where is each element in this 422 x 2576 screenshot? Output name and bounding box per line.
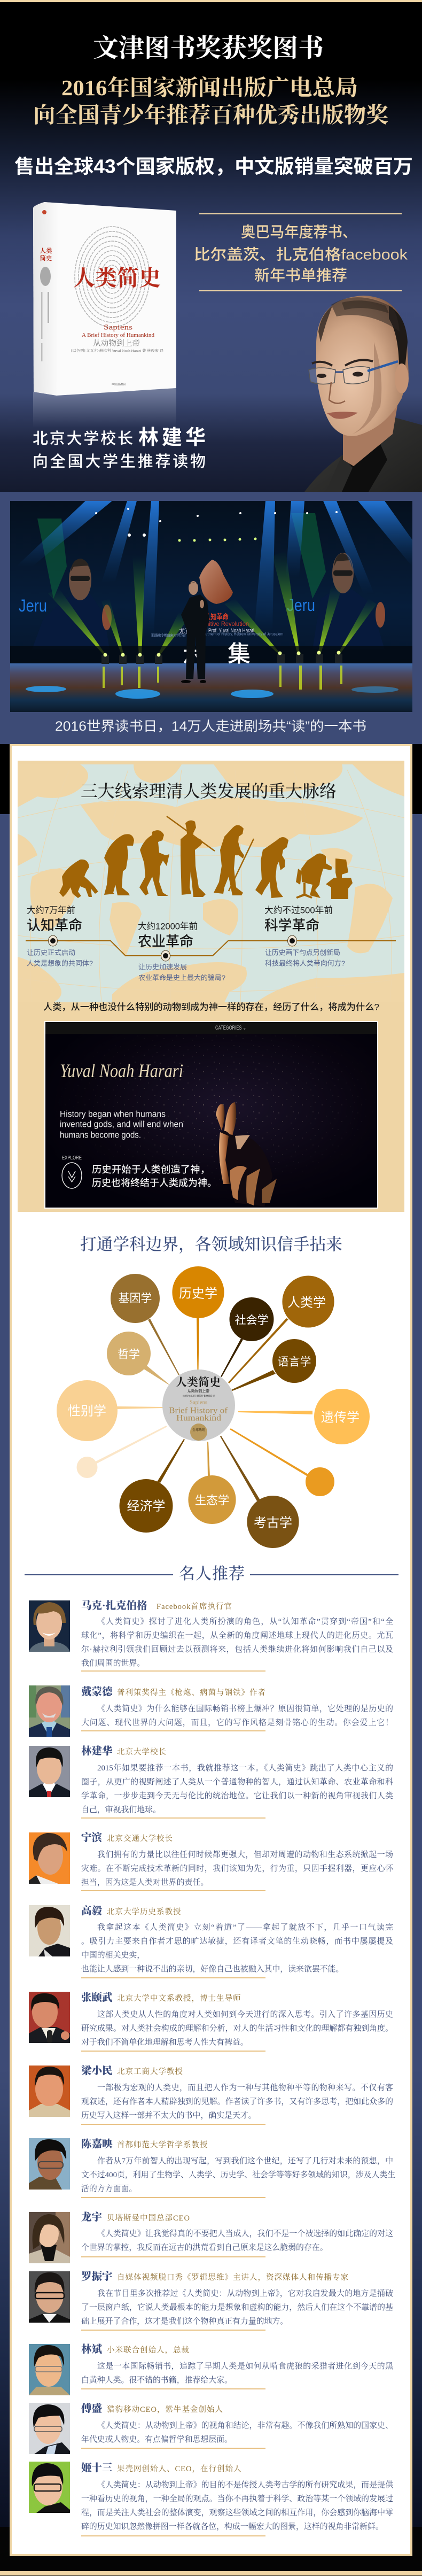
photo: theatre stage with speaker xyxy=(10,501,412,712)
heading: three threads: 三大线索理清人类发展的重大脉络 xyxy=(81,782,337,801)
center book: Sapiens: Brief History of xyxy=(169,1406,228,1415)
quote: 我们拥有的力量比以往任何时候都更强大，但却对周遭的动物和生态系统掀起一场 xyxy=(97,1851,393,1859)
quote: 年代史或人物史。有点偏哲学和思想层面。 xyxy=(81,2435,232,2444)
image: author web page screenshot: humans become gods. xyxy=(60,1130,141,1140)
portrait xyxy=(29,1600,70,1652)
quote: 也能让人感到一种说不出的亲切，好像自己也被融入其中，读来欲罢不能。 xyxy=(81,1965,343,1974)
name: 姬十三 xyxy=(81,2463,113,2474)
panel: three revolutions on map background xyxy=(18,761,404,1212)
quote xyxy=(81,1850,393,1887)
callout: book lists: 比尔盖茨、扎克伯格facebook xyxy=(194,246,408,263)
spine details xyxy=(42,210,46,214)
bubble: sociology (社会学): 社会学 xyxy=(235,1314,268,1327)
quote: 础上展开了合作，这才是我们这个物种真正有力量的地方。 xyxy=(81,2317,288,2326)
quote: 白黄种人类。很不错的书籍，推荐给大家。 xyxy=(81,2376,232,2385)
role: Facebook首席执行官 xyxy=(157,1603,232,1611)
recommendation: 戴蒙德 xyxy=(29,1685,393,1737)
center book: Sapiens: 从动物到上帝 xyxy=(187,1389,209,1393)
text: scientific revolution: 让历史画下句点另创新局 xyxy=(265,948,340,957)
name: 马克·扎克伯格 xyxy=(81,1600,147,1612)
book cover: A Brief History of Humankind xyxy=(82,332,154,338)
quote xyxy=(81,2156,395,2193)
name: 高毅 xyxy=(81,1906,102,1917)
quote xyxy=(81,2083,393,2120)
bubble: ecology (生态学): 生态学 xyxy=(195,1494,229,1507)
center book: Sapiens: 全球热销 xyxy=(192,1428,205,1432)
blue beams xyxy=(16,501,412,636)
portrait xyxy=(29,1905,70,1956)
center book: Sapiens xyxy=(162,1370,235,1441)
text: agricultural revolution: 大约12000年前 xyxy=(138,922,198,931)
screen captions: 尤瓦 xyxy=(179,628,191,635)
text: Peking University recommendation: 林建华 xyxy=(138,427,206,449)
portrait xyxy=(29,1992,70,2043)
recommendation: 林建华 xyxy=(29,1745,393,1819)
bubble: archaeology (考古学) xyxy=(247,1496,299,1548)
bubble: anthropology (人类学) xyxy=(282,1275,334,1328)
quote: 我在节目里多次推荐过《人类简史：从动物到上帝》，它对我启发最大的地方是捅破 xyxy=(97,2289,393,2298)
role: 北京大学校长 xyxy=(117,1748,167,1757)
screen captions: Prof. Yuval Noah Harari xyxy=(208,628,254,634)
heading: crossing disciplines: 打通学科边界，各领域知识信手拈来 xyxy=(80,1235,342,1254)
book cover: Sapiens xyxy=(104,324,132,331)
quote xyxy=(81,1923,393,1974)
role: 贝塔斯曼中国总部CEO xyxy=(107,2214,190,2223)
recommendation: 林斌 xyxy=(29,2343,393,2395)
bubble: philosophy (哲学): 哲学 xyxy=(118,1348,140,1361)
bubble: heredity (遗传学) xyxy=(314,1389,370,1444)
image: author web page screenshot: 历史也将终结于人类成为神。 xyxy=(92,1178,217,1188)
callout: book lists: 新年书单推荐 xyxy=(254,267,347,283)
quote: 碎的历史知识忽然像拼图一样各就各位，构成一幅宏大的图景，这样的视角非常新鲜。 xyxy=(81,2523,384,2531)
title: award: 文津图书奖获奖图书 xyxy=(93,35,324,63)
quote xyxy=(81,1617,393,1668)
text: scientific revolution: 科学革命 xyxy=(264,917,319,933)
timeline line with nodes xyxy=(26,935,396,961)
bubble: gender studies (性别学): 性别学 xyxy=(68,1404,106,1419)
icon: fingerprint on cover xyxy=(75,227,150,327)
heading: celebrity recommendations: 名人推荐 xyxy=(179,1565,245,1583)
text: central question: 人类，从一种也没什么特别的动物到成为神一样的存在，经历了什么，将成为什么? xyxy=(43,1002,379,1012)
role: 小米联合创始人，总裁 xyxy=(107,2346,190,2355)
text: sales claim: 售出全球43个国家版权，中文版销量突破百万 xyxy=(14,155,413,177)
quote: 这是一本国际畅销书，追踪了早期人类是如何从啃食虎狼的采猎者进化到今天的黑 xyxy=(97,2362,393,2371)
text: cognitive revolution xyxy=(27,906,93,968)
image: author web page screenshot: Yuval Noah Harari xyxy=(60,1060,183,1081)
book cover xyxy=(33,202,176,396)
role: 猎豹移动CEO，紫牛基金创始人 xyxy=(107,2405,223,2414)
image: author web page screenshot: CATEGORIES ⌄ xyxy=(215,1025,246,1031)
quote: 尔·赫拉利引领我们回顾过去以预测将来，包括人类继续进化将如何影响我们自己以及 xyxy=(81,1645,393,1654)
bubble: heredity (遗传学): 遗传学 xyxy=(321,1410,360,1425)
portrait xyxy=(29,2066,70,2117)
quote: 研究成果。对人类社会构成的理解和分析，对人的生活习性和文化的理解都有独到角度。 xyxy=(81,2024,393,2033)
quote xyxy=(81,1704,393,1727)
quote: 历史写入这样一部并不太大的书中，确实是天才。 xyxy=(81,2111,256,2120)
bubble: archaeology (考古学): 考古学 xyxy=(254,1516,292,1530)
book cover: 简史 xyxy=(40,254,52,262)
text: Peking University recommendation: 向全国大学生推荐读物 xyxy=(33,453,206,470)
role: 首都师范大学哲学系教授 xyxy=(117,2141,208,2149)
rock on screen xyxy=(199,560,233,604)
world map background xyxy=(18,764,404,1002)
image: author web page screenshot: 历史开始于人类创造了神， xyxy=(92,1164,210,1175)
quote: 文不过400页，利用了生物学、人类学、历史学、社会学等等好多领域的知识，涉及人类生 xyxy=(81,2171,395,2179)
name: 罗振宇 xyxy=(81,2271,113,2283)
bubble: ecology (生态学) xyxy=(188,1475,236,1524)
quote: 观叙述，还有作者本人精辟独到的见解。作者读了许多书，又有许多思考，把如此众多的 xyxy=(81,2098,393,2106)
text: cognitive revolution: 人类是想象的共同体? xyxy=(27,959,93,968)
bubble: sociology (社会学) xyxy=(230,1297,273,1341)
author portrait xyxy=(304,296,422,492)
bubble: economics (经济学): 经济学 xyxy=(127,1499,166,1514)
image: author web page screenshot: History began when humans xyxy=(60,1109,166,1119)
bubble: genetics (基因学) xyxy=(111,1274,160,1323)
portrait xyxy=(29,2212,70,2263)
quote xyxy=(81,1763,393,1814)
icon: explore chevrons xyxy=(62,1163,82,1188)
book cover: [以色列] 尤瓦尔·赫拉利 Yuval Noah Harari 著 林俊宏 译 xyxy=(71,349,163,353)
quote xyxy=(81,2478,393,2534)
right screen xyxy=(287,513,385,649)
quote: 自己，审视我们地球。 xyxy=(81,1806,161,1814)
image: author web page screenshot: EXPLORE xyxy=(62,1155,82,1161)
recommendation: 高毅 xyxy=(29,1905,393,1978)
screen captions: artment of History, Hebrew University of Jerusalem xyxy=(205,633,283,636)
right screen: Jeru xyxy=(287,595,315,615)
portrait xyxy=(29,2138,70,2190)
name: 戴蒙德 xyxy=(81,1687,113,1698)
quote: 我拿起这本《人类简史》立刻“着道”了——拿起了就放不下，几乎一口气读完 xyxy=(97,1923,393,1932)
heading: recommendation award xyxy=(33,75,388,127)
quote xyxy=(81,2419,393,2447)
screen captions: 耶路撒冷希伯来大学历史 xyxy=(151,633,186,637)
text: cognitive revolution: 认知革命 xyxy=(27,917,82,933)
bubble: history (历史学) xyxy=(172,1266,224,1318)
bubble: economics (经济学) xyxy=(120,1479,173,1533)
divider lines xyxy=(199,213,402,214)
quote: 。吸引力主要来自作者才思的旷达敏捷，还有译者文笔的生动晓畅，而书中屡屡提及 xyxy=(81,1937,393,1946)
left screen: Jeru xyxy=(19,596,47,615)
recommendation: 龙宇 xyxy=(29,2211,393,2263)
image: author web page screenshot: invented gods, and will end when xyxy=(60,1119,183,1129)
quote: 我们周围的世界。 xyxy=(81,1659,145,1668)
recommendation: 宁滨 xyxy=(29,1832,393,1891)
text: agricultural revolution: 农业革命 xyxy=(138,933,193,949)
name: 梁小民 xyxy=(81,2066,113,2077)
quote: 圈子，从更广的视野阐述了人类从一个普通物种的智人，通过认知革命、农业革命和科 xyxy=(81,1778,393,1786)
center book: Sapiens: 人类简史 xyxy=(176,1376,221,1389)
text: scientific revolution xyxy=(264,906,345,968)
center book: Sapiens: [以色列] 尤瓦尔·赫拉利 著 林俊宏 译 xyxy=(183,1394,215,1397)
book cover: 人类 xyxy=(40,247,52,254)
stage lights xyxy=(101,654,342,664)
quote: 球化”，将科学和历史编织在一起，从全新的角度阐述地球上现代人的进化历史。尤瓦 xyxy=(81,1631,393,1640)
quote: 《人类简史：从动物到上帝》的视角和结论，非常有趣。不像我们所熟知的国家史、 xyxy=(97,2422,393,2430)
quote: 《人类简史》为什么能够在国际畅销书榜上爆冲？原因很简单，它处理的是历史的 xyxy=(97,1705,393,1713)
text: book title on cover: 人类简史 xyxy=(73,266,161,290)
quote: 大问题、现代世界的大问题，而且，它的写作风格是刻骨铭心的生动。你会爱上它！ xyxy=(81,1719,393,1727)
portrait xyxy=(29,1685,70,1737)
stage signage: 集 xyxy=(228,641,251,667)
name: 宁滨 xyxy=(81,1832,102,1844)
quote: 学革命，一步步走到今天无与伦比的统治地位。它让我们以一种新的视角审视我们人类 xyxy=(81,1792,393,1800)
quote xyxy=(81,2362,393,2385)
center book: Sapiens: Humankind xyxy=(176,1413,221,1423)
recommendation: 罗振宇 xyxy=(29,2271,393,2331)
role: 果壳网创始人、CEO，在行创始人 xyxy=(117,2465,241,2473)
quote: 2015年如果要推荐一本书，我就推荐这一本。《人类简史》跳出了人类中心主义的 xyxy=(97,1764,393,1773)
center book: Sapiens: Sapiens xyxy=(190,1399,207,1406)
hand with finger xyxy=(216,1102,277,1206)
heading: recommendation award: 向全国青少年推荐百种优秀出版物奖 xyxy=(33,103,388,127)
quote: 一种看历史的视角，一种全局的观点。当你不再执着于科学、政治等某一个领域的发展过 xyxy=(81,2495,393,2503)
text: agricultural revolution xyxy=(138,922,225,981)
screen captions: nitive Revolution xyxy=(206,620,249,628)
role: 北京大学中文系教授，博士生导师 xyxy=(117,1994,241,2003)
name: 陈嘉映 xyxy=(81,2139,113,2150)
portrait xyxy=(29,2403,70,2454)
bubble: small left xyxy=(77,1457,97,1478)
name: 龙宇 xyxy=(81,2212,102,2223)
portrait xyxy=(29,2271,70,2323)
ceiling lamps xyxy=(95,508,338,542)
text: agricultural revolution: 农业革命是史上最大的骗局? xyxy=(138,974,225,981)
name: 张颐武 xyxy=(81,1992,113,2003)
recommendation: 梁小民 xyxy=(29,2065,393,2125)
quote xyxy=(81,2229,393,2252)
quote: 担当，因为这是人类对世界的责任。 xyxy=(81,1878,208,1887)
left screen xyxy=(19,519,112,649)
portrait xyxy=(29,1832,70,1884)
quote: 《人类简史：从动物到上帝》的目的不是传授人类考古学的所有研究成果，而是提供 xyxy=(97,2481,393,2489)
bubble: small right xyxy=(306,1467,334,1496)
text: cognitive revolution: 大约7万年前 xyxy=(27,906,75,915)
callout: book lists: 奥巴马年度荐书、 xyxy=(241,223,357,241)
text: scientific revolution: 科技最终将人类带向何方? xyxy=(265,959,345,968)
screen captions xyxy=(151,613,283,637)
quote: 了一层窗户纸，它说人类最根本的能力是想象和虚构的能力，然后人们在这个不靠谱的基 xyxy=(81,2303,393,2312)
recommendation: 姬十三 xyxy=(29,2462,397,2537)
role: 北京大学历史系教授 xyxy=(107,1908,182,1916)
recommendation: 陈嘉映 xyxy=(29,2138,395,2198)
quote: 程，而是关注人类社会的整体演变，观察这些领域之间的相互作用，你会感到你脑海中零 xyxy=(81,2509,393,2517)
quote: 对于我们不简单化地理解和思考人性大有裨益。 xyxy=(81,2038,248,2047)
name: 林建华 xyxy=(81,1746,113,1757)
text: cognitive revolution: 让历史正式启动 xyxy=(27,948,75,957)
quote: 中国的相关史实， xyxy=(81,1951,145,1960)
quote: 活的方方面面。 xyxy=(81,2185,137,2193)
stage signage xyxy=(183,641,251,667)
portrait xyxy=(29,1746,70,1797)
quote: 一部极为宏观的人类史，而且把人作为一种与其他物种平等的物种来写。不仅有客 xyxy=(97,2084,393,2092)
role: 普利策奖得主《枪炮、病菌与钢铁》作者 xyxy=(117,1689,266,1697)
stage band and floor xyxy=(10,646,412,665)
quote: 《人类简史》探讨了进化人类所扮演的角色，从“认知革命”贯穿到“帝国”和“全 xyxy=(97,1618,393,1626)
role: 北京交通大学校长 xyxy=(107,1835,173,1843)
quote xyxy=(81,2289,393,2326)
panel: white content card xyxy=(10,744,412,2556)
name: 林斌 xyxy=(81,2344,102,2355)
speaker figure xyxy=(181,581,209,683)
book cover: 从动物到上帝 xyxy=(93,338,140,348)
text: Peking University recommendation xyxy=(33,427,206,470)
role: 北京工商大学教授 xyxy=(117,2068,183,2076)
recommendation: 傅盛 xyxy=(29,2403,393,2454)
chart: discipline mind map xyxy=(57,1266,370,1548)
quote: 灾难。在不断完成技术革新的同时，我们该知为先，行为重，只因手握利器，更应心怀 xyxy=(81,1865,393,1873)
recommendation: 马克·扎克伯格 xyxy=(29,1600,393,1672)
portrait xyxy=(29,2462,70,2513)
bubble: genetics (基因学): 基因学 xyxy=(119,1293,152,1304)
bubble: linguistics (语言学): 语言学 xyxy=(278,1356,311,1368)
bubble: gender studies (性别学) xyxy=(57,1380,118,1441)
image: author web page screenshot xyxy=(44,1021,378,1209)
text: agricultural revolution: 让历史加速发展 xyxy=(138,963,187,971)
portrait xyxy=(29,2344,70,2395)
book cover: 中信出版集团 xyxy=(112,383,126,386)
recommendation: 张颐武 xyxy=(29,1992,393,2052)
callout: book lists xyxy=(194,223,408,283)
screen captions: 认知革命 xyxy=(205,613,229,621)
text: scientific revolution: 大约不过500年前 xyxy=(264,906,333,915)
panel: hero header with awards, book and author xyxy=(0,0,422,492)
bubble: linguistics (语言学) xyxy=(272,1339,316,1383)
bubble: philosophy (哲学) xyxy=(107,1332,151,1375)
role: 自媒体视频脱口秀《罗辑思维》主讲人，资深媒体人和传播专家 xyxy=(117,2273,349,2282)
book reflection xyxy=(33,388,176,428)
green beams xyxy=(48,551,377,655)
stage signage: 六 xyxy=(183,644,203,667)
caption: World Book Day: 2016世界读书日，14万人走进剧场共“读”的一本书 xyxy=(55,719,366,734)
quote: 《人类简史》让我觉得真的不要把人当成人，我们不是一个被选择的如此确定的对这 xyxy=(97,2230,393,2238)
bubble: history (历史学): 历史学 xyxy=(179,1286,217,1301)
heading: recommendation award: 2016年国家新闻出版广电总局 xyxy=(61,75,358,100)
text: Peking University recommendation: 北京大学校长 xyxy=(33,430,133,447)
quote: 这部人类史从人性的角度对人类如何到今天进行的深入思考。引入了许多基因历史 xyxy=(97,2010,393,2019)
quote: 个世界的掌控，我反而在远古的洪荒看到自己原来是这么脆弱的存在。 xyxy=(81,2244,328,2252)
quote xyxy=(81,2010,393,2047)
illustration: human evolution silhouettes xyxy=(59,816,353,899)
name: 傅盛 xyxy=(81,2403,102,2415)
spokes xyxy=(96,1317,312,1501)
bubble: anthropology (人类学): 人类学 xyxy=(287,1296,326,1310)
quote: 作者从7万年前智人的出现写起，写到我们这个世纪，还写了几行对未来的预想，中 xyxy=(97,2157,393,2165)
